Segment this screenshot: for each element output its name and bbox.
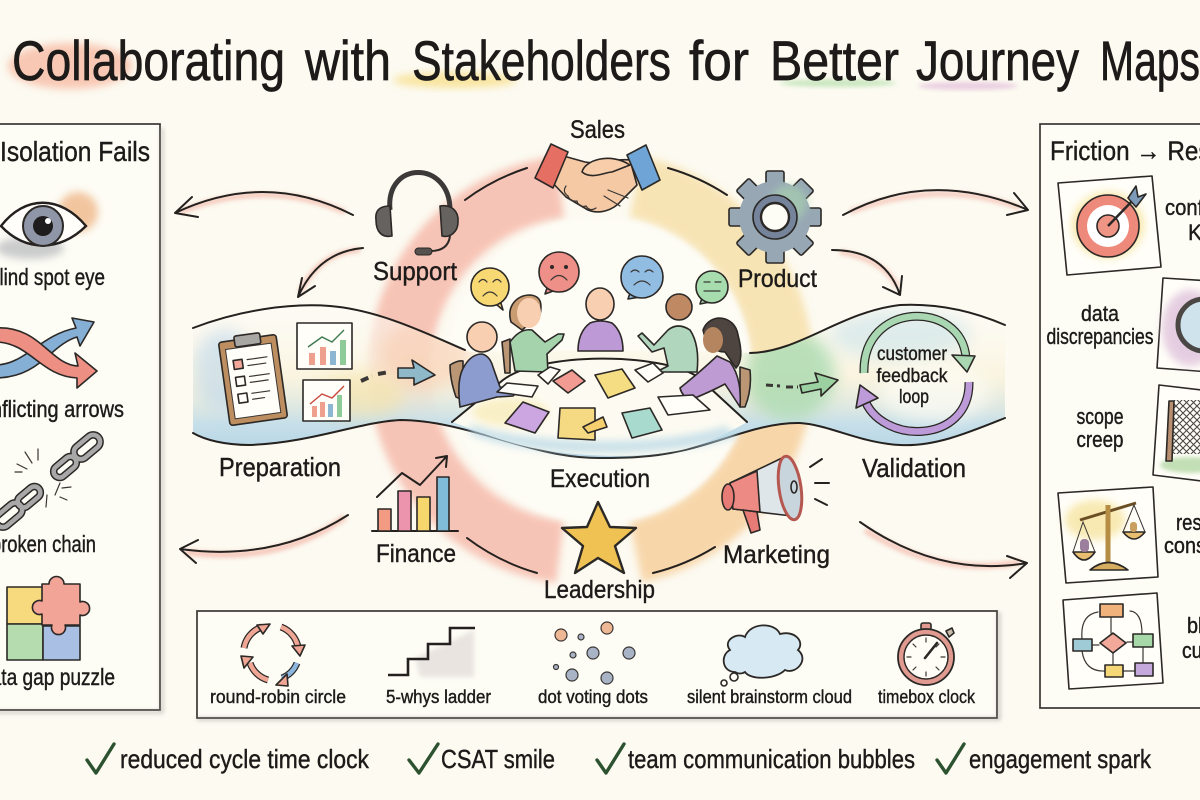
title: [8, 29, 1200, 92]
table meeting: [450, 252, 750, 493]
journey ribbon: [185, 300, 1015, 465]
arrow: to isolation panel bottom: [180, 515, 348, 563]
icon: headset: [376, 172, 458, 255]
label: timebox clock: timebox clock: [878, 687, 976, 707]
label: preparation: Preparation: [219, 452, 341, 482]
label: 5-whys ladder: 5-whys ladder: [386, 687, 491, 707]
person: dark hair purple: [680, 318, 750, 407]
label: scope creep: scope: [1076, 404, 1124, 429]
title: for: [689, 29, 749, 92]
icon: clipboard: [218, 330, 288, 426]
label: validation: Validation: [862, 453, 966, 483]
arrow: to friction panel top: [843, 190, 1028, 215]
icon: gear: [729, 171, 821, 263]
arrow: to friction panel bottom: [860, 522, 1027, 578]
person: green: [502, 295, 564, 373]
stakeholder: product: [729, 171, 821, 293]
card: blame culture flowchart: [1063, 593, 1163, 689]
label: data discrepancies: discrepancies: [1046, 324, 1154, 349]
stakeholder ring: [399, 168, 782, 573]
icon: customer feedback loop: loop: [899, 387, 929, 408]
icon: timebox clock: [898, 623, 954, 685]
person: purple centre: [578, 288, 623, 351]
icon: customer feedback loop: [856, 316, 975, 431]
outcomes row: [87, 744, 1152, 774]
title: Collaborating: [12, 29, 285, 92]
card: conflicting KPIs target: [1058, 176, 1161, 275]
title: Better: [770, 29, 899, 92]
icon: chart card two: [303, 380, 350, 421]
heading: isolation fails: Isolation Fails: [0, 136, 150, 167]
icon: silent brainstorm cloud: [721, 625, 802, 686]
outcome: reduced cycle time clock: reduced cycle time clock: [120, 744, 370, 774]
title: Journey: [916, 29, 1079, 92]
emoji: red face: [539, 252, 579, 294]
outcome: CSAT smile: [409, 744, 555, 774]
stage: preparation: [218, 323, 435, 482]
label: marketing: Marketing: [723, 541, 830, 569]
panel: why isolation fails: [0, 124, 162, 712]
icon: bar chart: [372, 456, 458, 531]
label: leadership: Leadership: [544, 576, 655, 604]
stage: validation: [766, 316, 975, 483]
label: finance: Finance: [376, 540, 456, 568]
papers on table: [497, 363, 710, 440]
person: blue: [450, 322, 516, 407]
icon: handshake: [535, 144, 660, 212]
card: scope creep fence: [1153, 385, 1200, 482]
label: scope creep: creep: [1076, 427, 1124, 452]
arrow: support to preparation: [298, 248, 363, 297]
label: execution: Execution: [550, 465, 650, 493]
stakeholder: leadership: [544, 502, 655, 604]
emoji: yellow face: [471, 268, 509, 310]
group of arrows to panels: [175, 190, 1028, 578]
emoji: blue face: [621, 256, 663, 299]
table yellow wash: [472, 398, 548, 426]
card: resource constraints scales: [1058, 487, 1158, 583]
table wash: [470, 424, 738, 453]
label: support: Support: [373, 256, 458, 286]
outcome: team communication bubbles: team communication bubbles: [628, 744, 915, 774]
emoji: green face: [696, 271, 728, 304]
icon: customer feedback loop: feedback: [876, 366, 948, 387]
label: sales: Sales: [570, 116, 625, 144]
arrow: execution to validation: [766, 373, 838, 396]
icon: blind spot eye: [0, 192, 98, 259]
icon: megaphone: [722, 455, 829, 533]
stakeholder: support: [373, 172, 458, 286]
icon: dot voting dots: [554, 622, 635, 684]
stakeholder: sales: [535, 116, 660, 212]
panel: friction to resolution: [1038, 124, 1200, 708]
label: dot voting dots: dot voting dots: [538, 687, 648, 707]
label: blame culture: [1182, 613, 1200, 663]
stakeholder: marketing: [722, 455, 830, 569]
title: with: [304, 29, 391, 92]
card: data discrepancies magnifier: [1157, 278, 1200, 372]
label: data discrepancies: data: [1081, 301, 1120, 326]
arrow: preparation to execution: [361, 360, 435, 385]
stakeholder: finance: [372, 456, 458, 568]
label: silent brainstorm cloud: silent brainstorm cloud: [687, 687, 852, 707]
icon: chart card one: [297, 323, 352, 369]
label: data discrepancies: [1046, 301, 1154, 349]
icon: data gap puzzle: [7, 576, 90, 660]
icon: broken chain: [0, 432, 103, 530]
label: round-robin circle: round-robin circle: [210, 687, 346, 707]
icon: star: [562, 502, 636, 573]
label: resource constraints: [1164, 510, 1200, 558]
icon: conflicting arrows: [0, 318, 97, 388]
table: [452, 359, 747, 456]
icon: 5-whys ladder: [388, 628, 475, 677]
outcome: CSAT smile: CSAT smile: [441, 744, 555, 774]
arrow: to isolation panel top: [175, 192, 353, 217]
title: Stakeholders: [412, 29, 671, 92]
icon: round-robin circle: [241, 624, 305, 686]
label: scope creep: [1076, 404, 1124, 452]
outcome: engagement spark: engagement spark: [969, 744, 1152, 774]
arrow: product to validation: [832, 250, 902, 295]
icon: customer feedback loop: customer: [877, 344, 948, 365]
person: teal: [638, 294, 698, 372]
label: product: Product: [738, 265, 817, 293]
table outline: [452, 359, 747, 422]
panel: facilitation techniques: [197, 611, 999, 719]
